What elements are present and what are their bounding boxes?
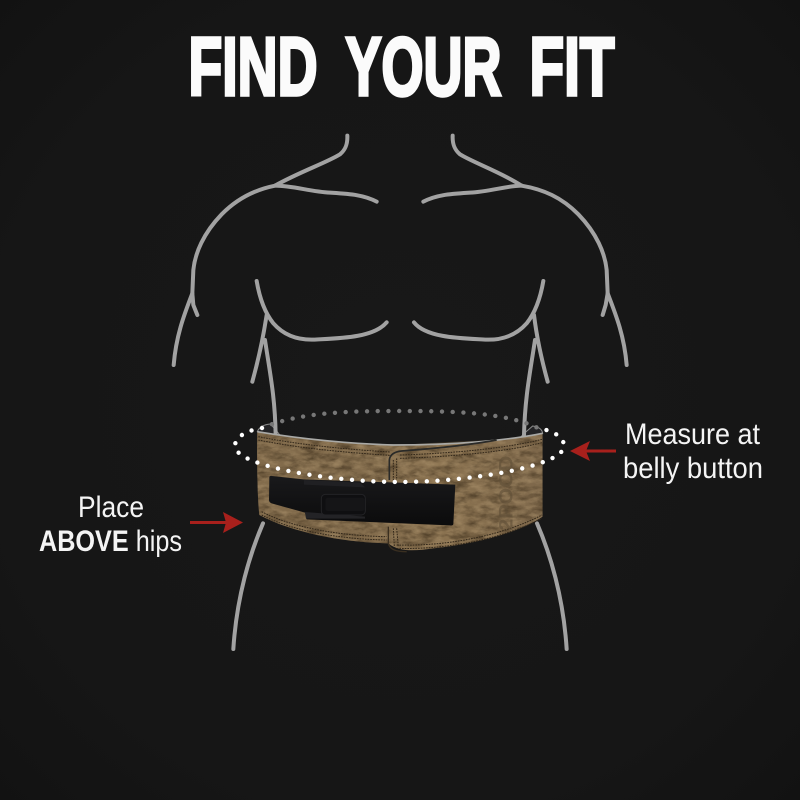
label: measure at belly button: belly button xyxy=(623,452,763,485)
embossed logo: 2POOD xyxy=(497,456,518,531)
lower body left hip xyxy=(233,523,263,649)
label: measure at belly button xyxy=(623,418,763,485)
weight belt xyxy=(257,431,543,552)
front of measuring loop xyxy=(235,428,564,482)
leather strap xyxy=(257,432,543,550)
back of measuring loop xyxy=(262,411,538,428)
label: place above hips: ABOVE hips xyxy=(39,525,182,558)
body outline xyxy=(174,136,627,649)
lever buckle xyxy=(269,476,455,525)
flap back edge xyxy=(393,440,503,445)
belt inner back rim xyxy=(257,424,543,438)
title: YOUR xyxy=(346,20,502,113)
upper body left side xyxy=(174,136,387,435)
label: place above hips xyxy=(39,491,182,558)
lever slot xyxy=(321,494,365,515)
label: place above hips: Place xyxy=(78,491,144,524)
belt top edge xyxy=(257,432,543,445)
label: measure at belly button: Measure at xyxy=(625,418,761,451)
stitching xyxy=(258,437,542,548)
title: FIND xyxy=(188,20,318,113)
belt flap outline xyxy=(389,440,497,480)
upper body right side xyxy=(414,136,627,435)
arrow: place above hips xyxy=(190,512,243,533)
lower body right hip xyxy=(537,523,567,649)
infographic canvas xyxy=(40,36,762,651)
title: FIT xyxy=(530,20,614,113)
arrow: measure at belly button xyxy=(570,441,616,461)
title xyxy=(188,20,614,113)
